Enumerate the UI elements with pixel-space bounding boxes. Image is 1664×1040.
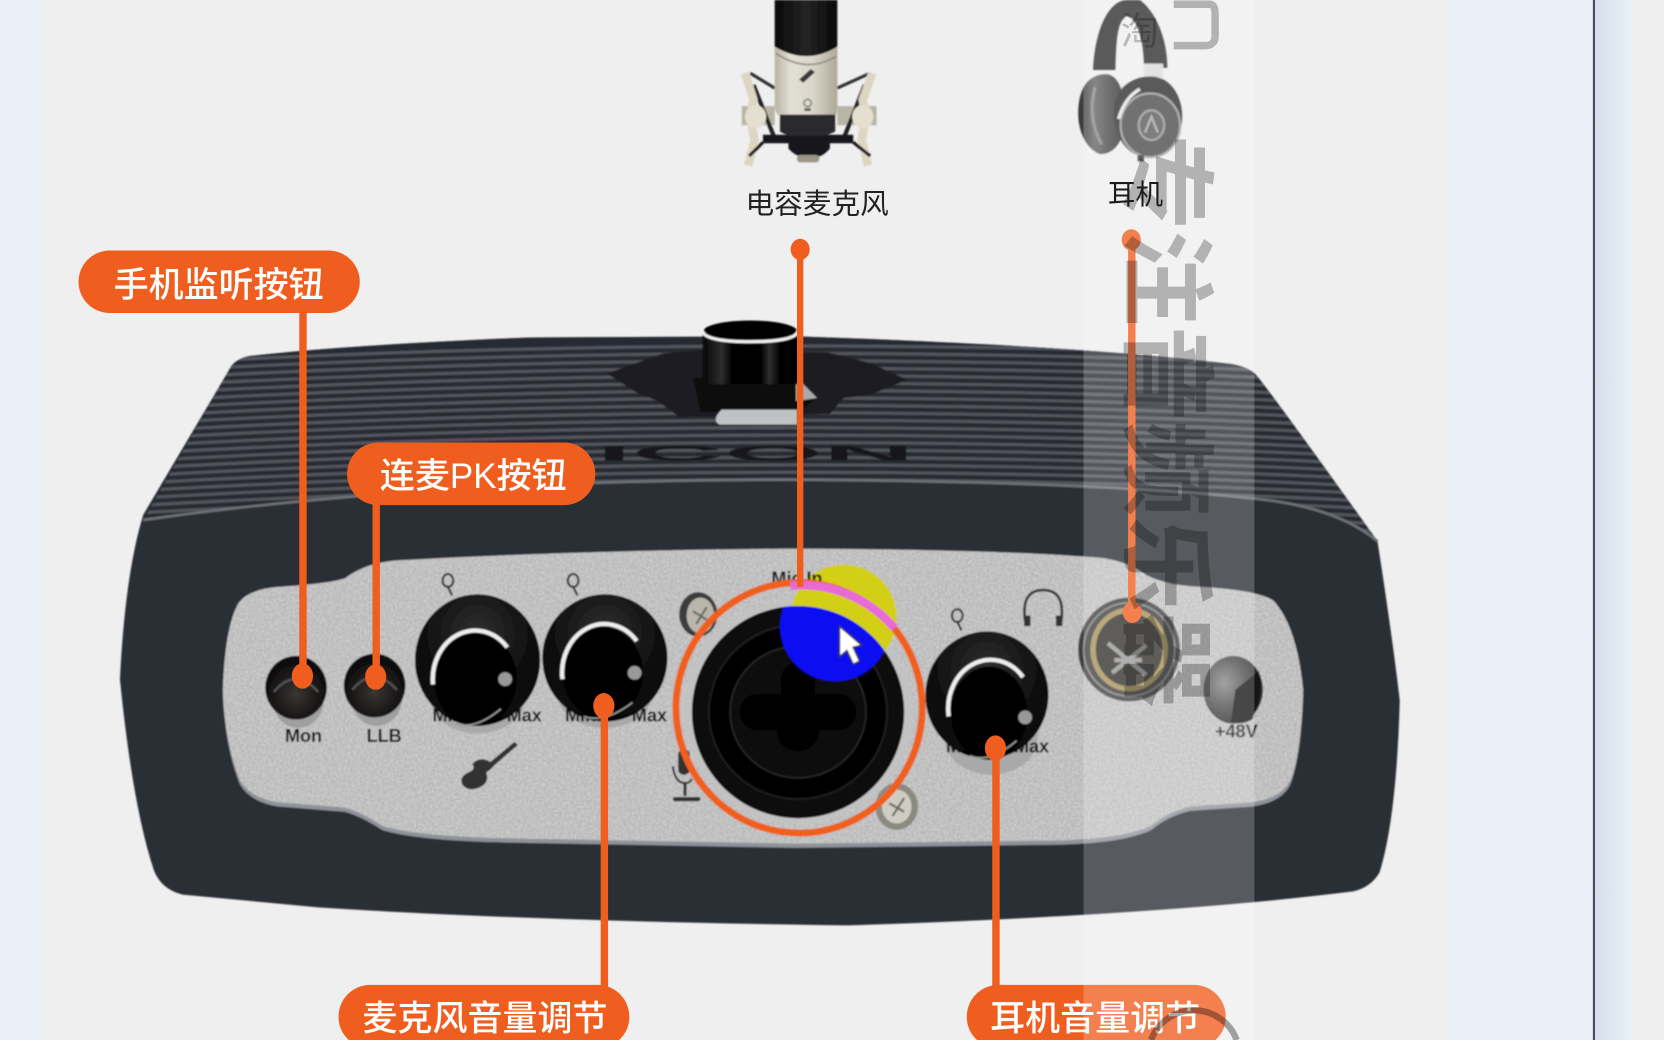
control labels: Max <box>507 706 542 726</box>
microphone volume knob <box>542 574 668 722</box>
LLB button <box>344 654 405 726</box>
combo input jack <box>683 599 913 824</box>
silver control panel <box>218 541 1311 849</box>
top rotary knob <box>607 320 907 424</box>
guitar volume knob <box>415 574 540 726</box>
mouse cursor <box>839 626 862 664</box>
watermark top glyphs: 淘 <box>1121 11 1159 54</box>
callout: headphone volume <box>967 735 1226 1040</box>
control labels: Min <box>565 706 596 726</box>
control labels: Max <box>1014 736 1049 756</box>
headphones illustration <box>1078 0 1182 161</box>
control labels: Min <box>946 736 977 756</box>
microphone illustration <box>742 0 877 166</box>
orange highlight ring <box>676 583 922 833</box>
guitar icon <box>461 742 518 789</box>
phantom power button <box>1203 656 1263 724</box>
connector: headphones to jack <box>1122 229 1142 623</box>
headphone volume knob <box>925 609 1048 760</box>
callout: headphone volume: 耳机音量调节 <box>990 999 1200 1038</box>
watermark strip <box>1084 0 1254 1040</box>
brand logo: ICON <box>596 443 915 466</box>
callout: microphone volume: 麦克风音量调节 <box>362 999 608 1038</box>
ribbed top cover <box>146 336 1374 536</box>
lower mounting screw <box>876 783 918 830</box>
rotated watermark text: 专注音频乐器 <box>1111 135 1217 708</box>
microphone stand icon <box>673 749 700 801</box>
click highlight: blue spot <box>778 604 886 683</box>
headphone output jack <box>1078 597 1180 701</box>
callout: PK linking button: 连麦PK按钮 <box>380 457 567 496</box>
pink arc <box>791 585 895 628</box>
front edge highlight <box>143 480 1377 541</box>
callout: microphone volume <box>339 693 629 1040</box>
callout: phone monitor button <box>79 250 360 689</box>
monitor button <box>265 656 327 728</box>
control labels: Mon <box>285 726 322 746</box>
click highlight: yellow halo <box>791 565 897 671</box>
watermark top glyphs <box>1121 4 1215 54</box>
label: condenser microphone: 电容麦克风 <box>746 188 889 220</box>
device body <box>120 336 1400 925</box>
callout: phone monitor button: 手机监听按钮 <box>114 266 324 305</box>
control labels <box>285 706 1258 756</box>
label: headphones: 耳机 <box>1108 179 1163 210</box>
knob drop shadows <box>431 662 1038 775</box>
input label: Mic In <box>771 569 823 589</box>
connector: microphone to input <box>791 239 810 587</box>
headphone icon on panel <box>1024 590 1062 626</box>
callout: PK linking button <box>347 443 595 690</box>
control labels: LLB <box>367 726 402 746</box>
watermark round logo <box>1151 1010 1237 1040</box>
control labels: +48V <box>1215 722 1258 742</box>
upper mounting screw <box>679 592 717 637</box>
audio interface device <box>106 318 1486 925</box>
control labels: Max <box>632 706 667 726</box>
control labels: Min <box>432 706 463 726</box>
